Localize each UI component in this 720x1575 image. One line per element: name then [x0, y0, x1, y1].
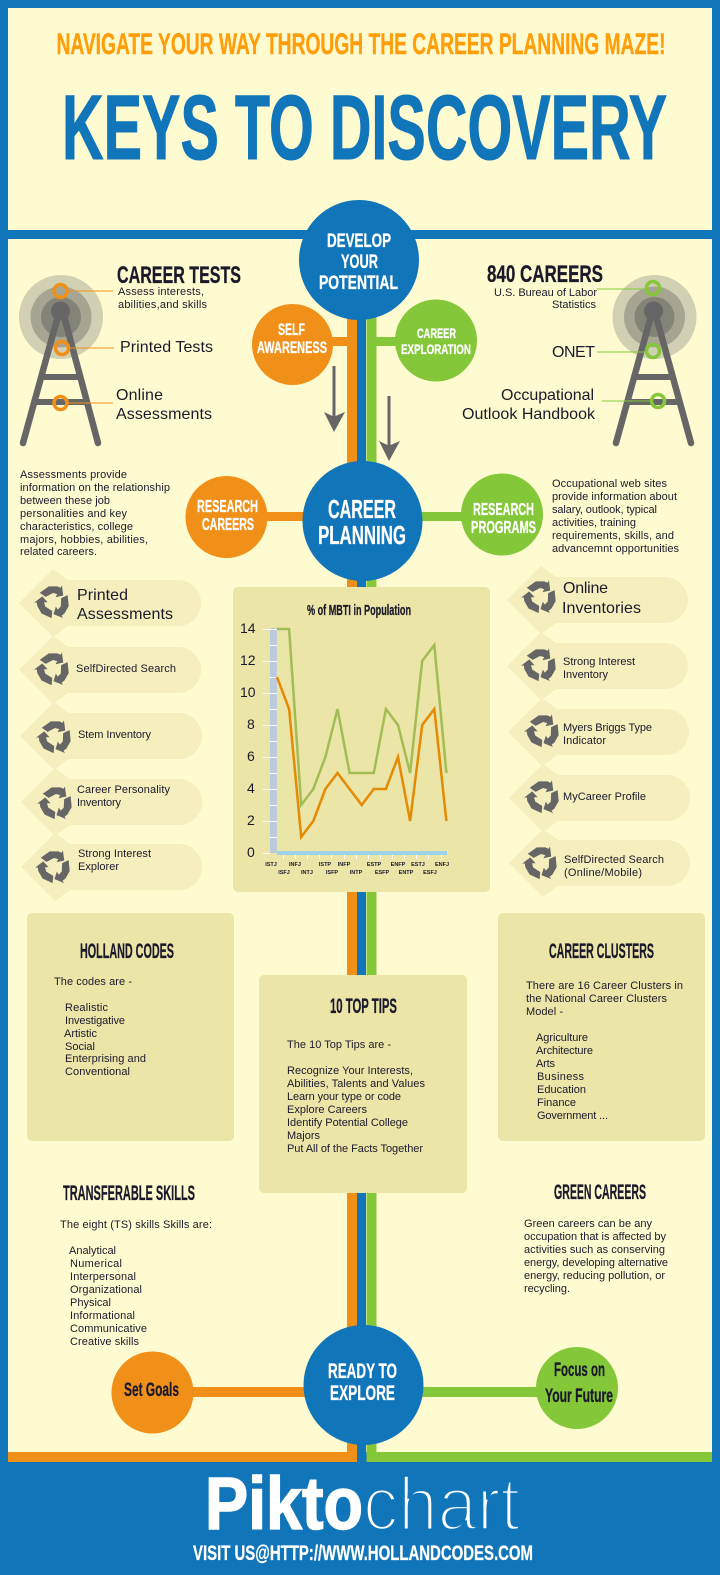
panel: 10 top tips: Identify Potential College — [287, 1117, 408, 1129]
item: myers briggs type indicator: Indicator — [563, 735, 606, 747]
y axis labels — [240, 620, 256, 860]
connector: research programs — [415, 512, 465, 521]
y axis labels: 0 — [247, 844, 255, 860]
list: online inventories — [507, 566, 690, 897]
node: set goals: Set Goals — [124, 1380, 179, 1401]
item: myers briggs type indicator — [508, 698, 689, 766]
panel: holland codes: Realistic — [65, 1002, 108, 1014]
block: green careers — [524, 1180, 668, 1295]
connector: focus on your future — [415, 1387, 543, 1397]
x axis labels: ENTP — [399, 870, 414, 876]
text: occupational web sites description: Occupational web sites — [552, 478, 668, 490]
item: my career profile: MyCareer Profile — [563, 791, 646, 803]
text: assess interests: abilities,and skills — [118, 299, 208, 311]
text: assessments description: information on the relationship — [20, 482, 170, 494]
block: green careers: recycling. — [524, 1283, 570, 1295]
y axis labels: 2 — [247, 812, 255, 828]
panel: career clusters — [498, 913, 705, 1141]
item: myers briggs type indicator: Myers Briggs Type — [563, 722, 652, 734]
node: career planning: PLANNING — [318, 522, 406, 550]
y axis labels: 6 — [247, 748, 255, 764]
text: bureau of labor statistics — [494, 287, 597, 311]
panel: career clusters: Arts — [536, 1058, 556, 1070]
x axis labels: ESTP — [367, 862, 382, 868]
block: transferable skills: TRANSFERABLE SKILLS — [63, 1181, 195, 1205]
block: transferable skills: Interpersonal — [70, 1271, 136, 1283]
x axis labels: ENFJ — [435, 862, 449, 868]
text: assessments description: majors, hobbies, abilities, — [20, 534, 148, 546]
item: strong interest inventory: Strong Interest — [563, 656, 635, 668]
panel: holland codes: HOLLAND CODES — [80, 939, 174, 963]
panel: holland codes: Conventional — [65, 1066, 130, 1078]
panel: MBTI line chart — [233, 587, 490, 892]
connector: research careers — [260, 512, 310, 521]
node: career exploration — [395, 300, 477, 382]
node: research careers — [186, 476, 268, 558]
node: research careers: RESEARCH — [197, 496, 258, 516]
panel: career clusters: Business — [537, 1071, 584, 1083]
icon: right tower — [597, 275, 696, 443]
block: green careers: occupation that is affected by — [524, 1231, 666, 1243]
x axis labels: ISFP — [326, 870, 338, 876]
panel: holland codes: Enterprising and — [65, 1053, 146, 1065]
connector: career exploration — [372, 337, 402, 346]
block: transferable skills: Physical — [70, 1297, 111, 1309]
panel: holland codes — [27, 913, 234, 1141]
text: occupational outlook handbook: Outlook Handbook — [462, 406, 596, 423]
text: assessments description: personalities and key — [20, 508, 128, 520]
node: career planning: CAREER — [328, 496, 396, 524]
block: transferable skills: Communicative — [70, 1323, 147, 1335]
panel: holland codes: Social — [65, 1041, 95, 1053]
panel: career clusters: the National Career Clusters — [526, 993, 668, 1005]
text: online assessments: Assessments — [116, 406, 212, 423]
y axis labels: 12 — [240, 652, 256, 668]
node: research programs — [461, 474, 543, 556]
panel: 10 top tips — [259, 975, 467, 1193]
item: strong interest explorer: Strong Interest — [78, 848, 151, 860]
item: strong interest inventory — [507, 632, 688, 700]
connector: set goals — [185, 1387, 310, 1397]
panel: holland codes: Artistic — [64, 1028, 98, 1040]
item: printed assessments — [19, 569, 201, 637]
item: printed assessments: Assessments — [77, 606, 173, 623]
arrow: down left — [324, 366, 345, 432]
text: assess interests: Assess interests, — [118, 286, 204, 298]
x axis labels: INTJ — [301, 870, 313, 876]
green career path line — [372, 300, 712, 1457]
node: set goals — [112, 1352, 194, 1434]
node: career exploration: EXPLORATION — [401, 341, 471, 357]
item: self directed search — [19, 636, 201, 704]
item: self directed search online: (Online/Mobile) — [564, 867, 642, 879]
node: develop your potential: DEVELOP — [327, 230, 391, 252]
item: online inventories: Inventories — [562, 600, 641, 617]
node: focus on your future — [536, 1347, 618, 1429]
text: occupational web sites description: salary, outlook, typical — [552, 504, 657, 516]
x axis labels: ESFJ — [423, 870, 437, 876]
text: online assessments: Online — [116, 387, 163, 404]
item: stem inventory — [20, 702, 202, 770]
x axis labels: ENFP — [391, 862, 406, 868]
block: transferable skills: Organizational — [70, 1284, 142, 1296]
block: green careers: Green careers can be any — [524, 1218, 652, 1230]
item: strong interest explorer: Explorer — [78, 861, 119, 873]
text: printed tests: Printed Tests — [120, 339, 213, 356]
series: orange line — [277, 677, 446, 837]
text: assess interests — [118, 286, 208, 311]
text: occupational web sites description: advancemnt opportunities — [552, 543, 680, 555]
heading: 840 careers: 840 CAREERS — [487, 261, 603, 288]
x axis labels: ISTP — [319, 862, 331, 868]
item: self directed search: SelfDirected Search — [76, 663, 176, 675]
block: transferable skills: Creative skills — [70, 1336, 140, 1348]
node: develop your potential: YOUR — [341, 251, 378, 273]
item: strong interest inventory: Inventory — [563, 669, 608, 681]
footer link: VISIT US@HTTP://WWW.HOLLANDCODES.COM — [193, 1541, 533, 1565]
panel: left content background — [8, 239, 357, 1452]
text: onet: ONET — [552, 344, 595, 361]
text: assessments description: between these job — [20, 495, 110, 507]
item: strong interest explorer — [21, 833, 202, 901]
text: occupational web sites description: activities, training — [552, 517, 636, 529]
text: occupational web sites description: requirements, skills, and — [552, 530, 674, 542]
block: transferable skills — [60, 1181, 212, 1348]
panel: career clusters: Architecture — [536, 1045, 593, 1057]
x axis labels: ISFJ — [278, 870, 290, 876]
text: assessments description: related careers. — [20, 546, 97, 558]
block: transferable skills: Informational — [70, 1310, 135, 1322]
node: focus on your future: Your Future — [545, 1386, 613, 1407]
block: green careers: energy, reducing pollution, or — [524, 1270, 665, 1282]
arrow: down right — [379, 396, 400, 461]
panel: holland codes: The codes are - — [54, 976, 132, 988]
y axis labels: 14 — [240, 620, 256, 636]
node: research programs: RESEARCH — [473, 499, 534, 519]
item: self directed search online: SelfDirected Search — [564, 854, 664, 866]
orange career path line — [8, 300, 352, 1457]
x axis labels: ESFP — [375, 870, 390, 876]
node: focus on your future: Focus on — [554, 1360, 605, 1381]
panel: career clusters: There are 16 Career Clusters in — [526, 980, 683, 992]
x axis labels: ESTJ — [411, 862, 425, 868]
node: self awareness: SELF — [278, 320, 305, 339]
heading: career tests: CAREER TESTS — [117, 262, 241, 289]
item: online inventories: Online — [563, 580, 608, 597]
item: stem inventory: Stem Inventory — [78, 729, 152, 741]
text: assessments description: characteristics, college — [20, 521, 133, 533]
text: online assessments — [116, 387, 212, 423]
panel: career clusters: Government ... — [537, 1110, 608, 1122]
text: occupational outlook handbook: Occupational — [501, 387, 594, 404]
text: bureau of labor statistics: U.S. Bureau of Labor — [494, 287, 597, 299]
item: self directed search online — [509, 829, 690, 897]
panel: 10 top tips: Explore Careers — [287, 1104, 368, 1116]
panel: right content background — [366, 239, 712, 1452]
panel: career clusters: Model - — [526, 1006, 563, 1018]
panel: 10 top tips: Recognize Your Interests, — [287, 1065, 413, 1077]
panel: 10 top tips: Put All of the Facts Together — [287, 1143, 423, 1155]
block: green careers: activities such as conserving — [524, 1244, 665, 1256]
text: assessments description — [20, 469, 170, 558]
text: assessments description: Assessments provide — [20, 469, 127, 481]
text: bureau of labor statistics: Statistics — [552, 299, 596, 311]
panel: 10 top tips: Learn your type or code — [287, 1091, 401, 1103]
node: ready to explore — [304, 1325, 424, 1445]
x axis labels: INFJ — [289, 862, 301, 868]
footer logo — [205, 1462, 520, 1547]
x axis labels: INTP — [350, 870, 363, 876]
item: my career profile — [509, 764, 690, 832]
node: research programs: PROGRAMS — [471, 517, 536, 537]
y axis labels: 8 — [247, 716, 255, 732]
text: occupational outlook handbook — [462, 387, 596, 423]
x axis labels — [265, 862, 449, 876]
chart title: % of MBTI in Population — [307, 602, 411, 619]
block: transferable skills: Numerical — [70, 1258, 122, 1270]
x axis labels: INFP — [338, 862, 351, 868]
y axis labels: 10 — [240, 684, 256, 700]
item: career personality inventory: Inventory — [77, 797, 122, 809]
panel: holland codes: Investigative — [65, 1015, 125, 1027]
panel: header — [8, 8, 712, 230]
footer logo: chart — [363, 1462, 520, 1547]
x axis band — [277, 851, 447, 855]
node: ready to explore: READY TO — [328, 1359, 397, 1383]
item: online inventories — [507, 566, 688, 634]
panel: career clusters: Agriculture — [536, 1032, 588, 1044]
icon: left tower — [19, 275, 114, 443]
x axis labels: ISTJ — [265, 862, 277, 868]
text: occupational web sites description: provide information about — [552, 491, 677, 503]
item: career personality inventory — [21, 768, 202, 836]
text: occupational web sites description — [552, 478, 680, 555]
panel: 10 top tips: Abilities, Talents and Values — [287, 1078, 426, 1090]
block: transferable skills: The eight (TS) skills Skills are: — [60, 1219, 212, 1231]
item: printed assessments: Printed — [77, 587, 128, 604]
item: career personality inventory: Career Personality — [77, 784, 170, 796]
footer logo: Pikto — [205, 1462, 363, 1545]
node: ready to explore: EXPLORE — [330, 1381, 395, 1405]
block: green careers: energy, developing alternative — [524, 1257, 668, 1269]
series: green line — [277, 629, 446, 805]
node: develop your potential: POTENTIAL — [319, 272, 398, 294]
block: transferable skills: Analytical — [69, 1245, 116, 1257]
y axis band — [270, 628, 277, 853]
node: develop your potential — [299, 200, 419, 320]
panel: 10 top tips: 10 TOP TIPS — [330, 994, 397, 1018]
node: self awareness — [252, 304, 333, 385]
node: career planning — [302, 461, 422, 581]
list: printed assessments — [19, 569, 202, 901]
panel: career clusters: Finance — [537, 1097, 576, 1109]
panel: 10 top tips: Majors — [287, 1130, 320, 1142]
node: self awareness: AWARENESS — [257, 338, 327, 357]
node: career exploration: CAREER — [417, 325, 456, 341]
panel: 10 top tips: The 10 Top Tips are - — [287, 1039, 391, 1051]
y axis labels: 4 — [247, 780, 255, 796]
node: research careers: CAREERS — [202, 514, 254, 534]
panel: career clusters: Education — [537, 1084, 586, 1096]
connector: self awareness — [325, 337, 350, 346]
